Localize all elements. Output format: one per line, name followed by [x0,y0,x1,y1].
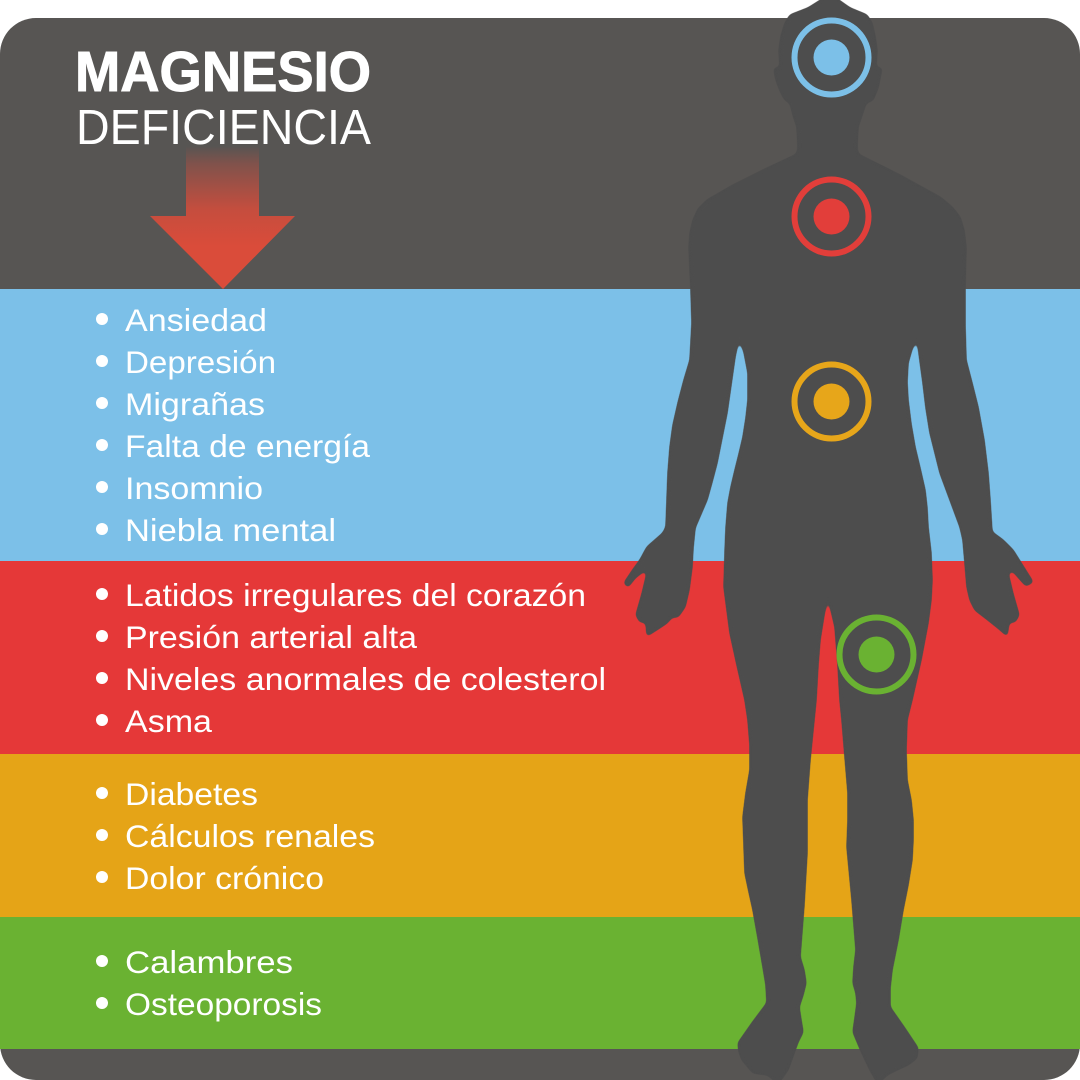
panel: orange symptoms [0,754,1080,917]
marker: head (blue) [794,20,868,94]
panel: blue symptoms [0,289,1080,561]
item: Calambres: Calambres [125,944,293,980]
item: Asma: Asma [125,703,213,739]
marker: thigh (green) [840,618,914,692]
item: Depresión: Depresión [125,344,276,380]
item: Falta de energía: Falta de energía [125,428,371,464]
title: MAGNESIO [75,40,371,104]
item: Asma [96,703,213,739]
panel: red symptoms [0,561,1080,754]
item: Diabetes: Diabetes [125,776,258,812]
item: Ansiedad: Ansiedad [125,302,267,338]
title [75,40,371,155]
item: Dolor crónico: Dolor crónico [125,860,324,896]
item: Cálculos renales: Cálculos renales [125,818,375,854]
marker: abdomen (orange) [794,364,868,438]
arrow: down gradient [150,146,295,289]
marker: chest (red) [794,180,868,254]
item: Presión arterial alta: Presión arterial alta [125,619,418,655]
item: Niebla mental: Niebla mental [125,512,336,548]
title: DEFICIENCIA [76,100,371,155]
human body silhouette [624,0,1033,1080]
item: Migrañas: Migrañas [125,386,265,422]
item: Osteoporosis: Osteoporosis [125,986,322,1022]
item: Insomnio: Insomnio [125,470,263,506]
item: Latidos irregulares del corazón: Latidos irregulares del corazón [125,577,586,613]
panel: green symptoms [0,917,1080,1049]
item: Niveles anormales de colesterol: Niveles anormales de colesterol [125,661,606,697]
